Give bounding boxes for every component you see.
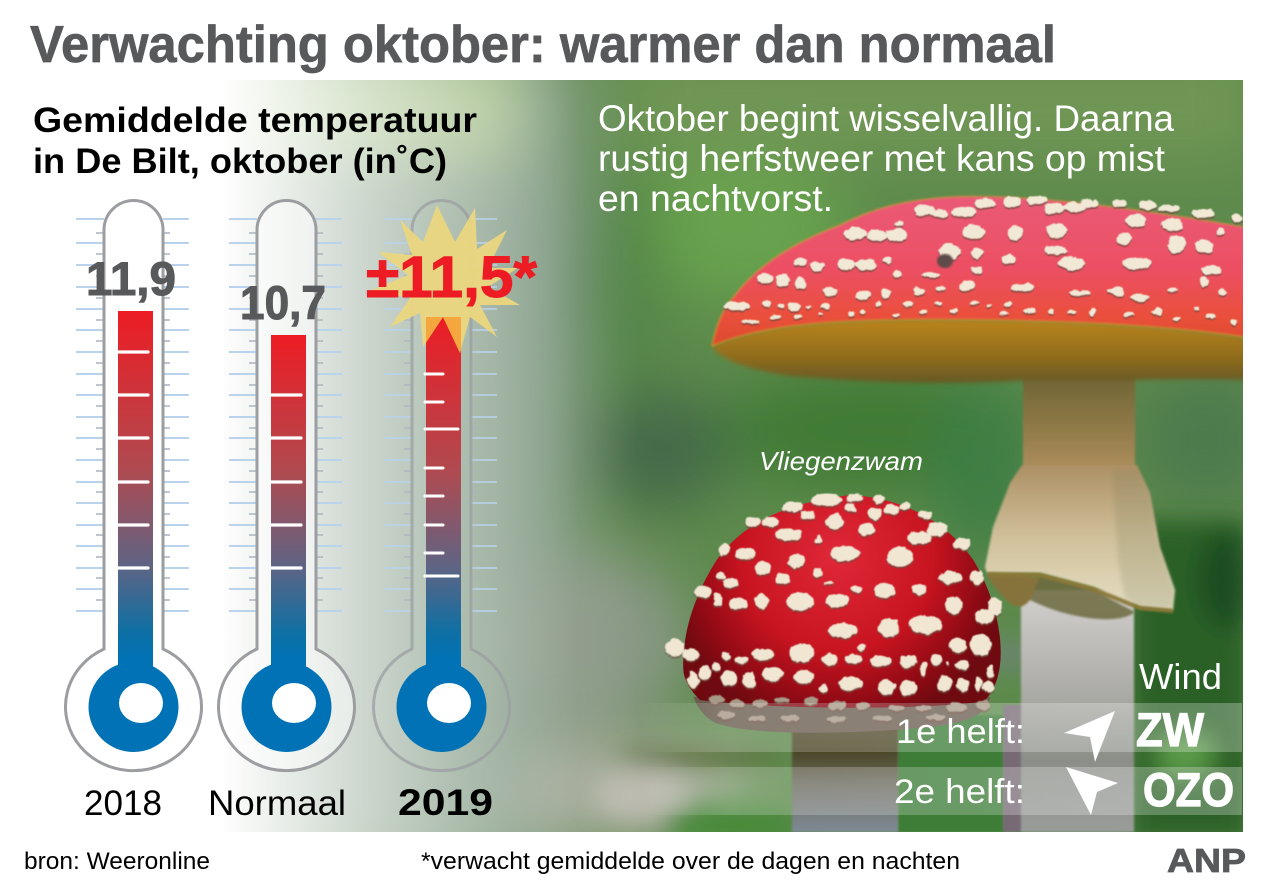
- arrow: east-south-east: [1066, 767, 1118, 815]
- sun over mercury: [426, 317, 461, 353]
- axis label: Normaal: Normaal: [208, 784, 346, 823]
- small mushroom gills: [693, 697, 990, 733]
- small mushroom lower warts: [709, 695, 991, 722]
- small mushroom cap: [683, 495, 1001, 708]
- background band between stems: [898, 715, 1004, 832]
- panel: wind: [640, 656, 1242, 816]
- label second half: 2e helft:: [894, 773, 1025, 811]
- source: bron: Weeronline: [24, 848, 210, 875]
- small mushroom stem: [792, 715, 898, 832]
- label first half: 1e helft:: [896, 713, 1025, 751]
- icon: sun burst: [372, 205, 520, 353]
- value: 11,5: ±11,5*: [366, 245, 537, 310]
- ring fringe: [987, 573, 1173, 619]
- wart stain: [937, 254, 953, 268]
- band first half: [640, 703, 1242, 752]
- heading: chart subtitle: Gemiddelde temperatuur: [33, 101, 477, 140]
- direction OZO: OZO: [1143, 763, 1234, 816]
- chart: thermometer 2019: [366, 200, 537, 771]
- ring shading: [1112, 470, 1175, 610]
- small mushroom warts: [665, 493, 1002, 695]
- footnote: *verwacht gemiddelde over de dagen en nachten: [421, 848, 960, 875]
- big mushroom lower stem: [1021, 590, 1134, 832]
- chart: thermometer 2018: [66, 201, 202, 771]
- big mushroom cap: [712, 196, 1250, 346]
- axis label: 2019: 2019: [398, 782, 493, 823]
- fade to white at left: [0, 80, 640, 832]
- caption: species: Vliegenzwam: [759, 446, 923, 476]
- axis label: 2018: 2018: [84, 784, 162, 823]
- arrow: south-west: [1064, 711, 1115, 762]
- band second half: [640, 767, 1242, 815]
- heading: chart subtitle: [33, 101, 477, 181]
- big mushroom underside: [712, 320, 1250, 383]
- panel: photo of fly agarics: [243, 80, 1243, 832]
- wind heading: Wind: [1139, 656, 1222, 697]
- big mushroom ring: [985, 465, 1175, 610]
- value: 11,9: 11,9: [86, 252, 176, 305]
- big mushroom upper stem: [1023, 375, 1135, 470]
- logo: ANP: ANP: [1167, 842, 1246, 879]
- big mushroom warts: [724, 196, 1243, 325]
- chart: thermometer Normaal: [218, 200, 355, 771]
- value: 10,7: 10,7: [240, 276, 326, 329]
- text block: forecast: rustig herfstweer met kans op mist: [598, 138, 1166, 179]
- title: Verwachting oktober: warmer dan normaal: [30, 16, 1056, 74]
- text block: forecast: [598, 98, 1174, 219]
- text block: forecast: en nachtvorst.: [598, 178, 833, 219]
- heading: chart subtitle: in De Bilt, oktober (in˚C): [33, 142, 447, 181]
- direction ZW: ZW: [1136, 703, 1205, 756]
- text block: forecast: Oktober begint wisselvallig. Daarna: [598, 98, 1174, 139]
- background purple patch: [1003, 705, 1023, 832]
